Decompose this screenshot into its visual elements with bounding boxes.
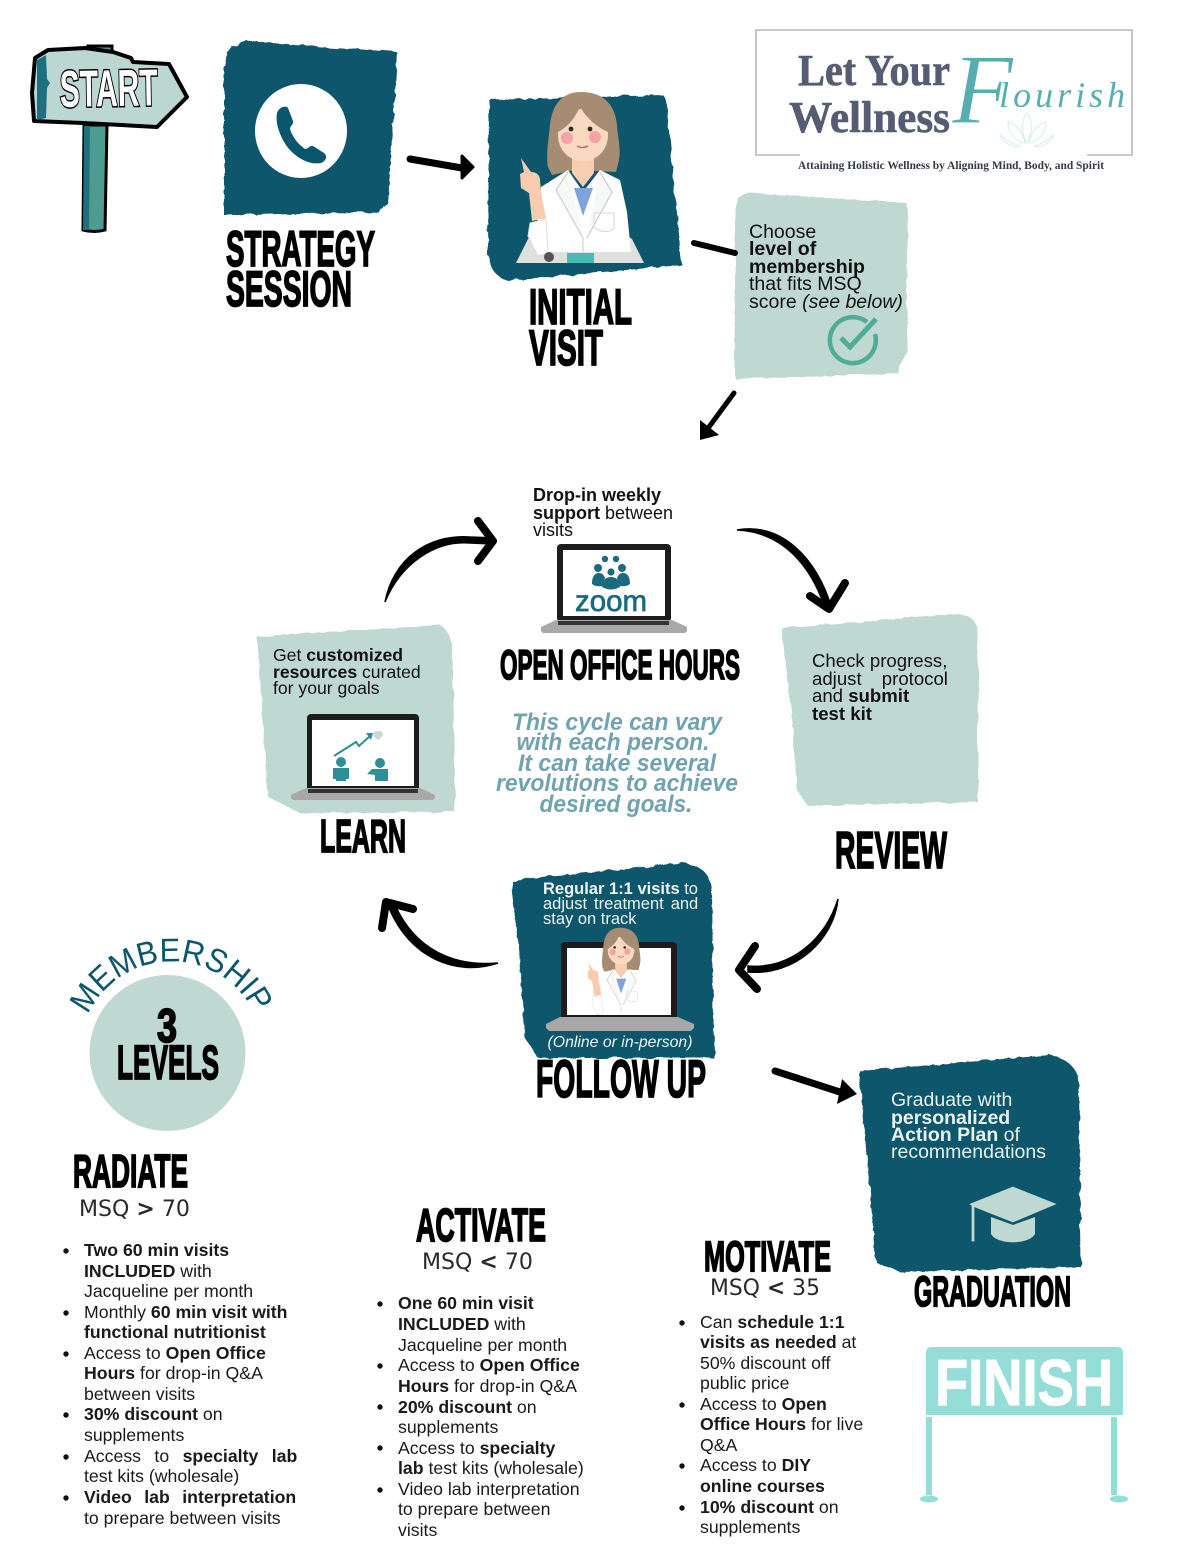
panel: strategy session (224, 41, 397, 215)
list: radiate benefits: supplements (84, 1425, 184, 1445)
heading: strategy session (226, 221, 375, 317)
panel: review (781, 614, 978, 806)
logo: F (951, 34, 1014, 145)
list: activate benefits (377, 1293, 589, 1540)
heading: motivate: MOTIVATE (704, 1233, 831, 1281)
heading: initial visit: INITIAL (529, 279, 632, 335)
list: radiate benefits: Monthly 60 min visit with (84, 1302, 287, 1322)
text: check progress: Check progress, (812, 650, 947, 671)
text: regular visits: adjust treatment and (543, 895, 698, 913)
text: drop-in support: Drop-in weekly (533, 485, 661, 505)
list: motivate benefits: Access to DIY (700, 1455, 811, 1475)
text: cycle note (496, 709, 738, 818)
icon: phone (255, 84, 347, 178)
membership text: level of (749, 238, 817, 260)
list: motivate benefits: Office Hours for live (700, 1414, 863, 1434)
heading: strategy session: SESSION (226, 261, 352, 317)
text: customized resources: resources curated (273, 662, 421, 682)
text: graduate: recommendations (891, 1141, 1046, 1163)
arrow: down to cycle (700, 393, 734, 440)
list: radiate benefits: functional nutritionist (84, 1322, 266, 1342)
list: radiate benefits: to prepare between visits (84, 1508, 281, 1528)
list: motivate benefits: Q&A (700, 1435, 738, 1455)
icon: graduation cap (968, 1186, 1058, 1242)
curved text: membership: MEMBERSHIP (70, 938, 271, 1012)
heading: graduation: GRADUATION (914, 1268, 1071, 1316)
list: radiate benefits (63, 1240, 302, 1528)
list: radiate benefits: INCLUDED with (84, 1261, 212, 1281)
list: activate benefits: Hours for drop-in Q&A (398, 1376, 576, 1396)
list: activate benefits: to prepare between (398, 1499, 550, 1519)
icon: learn laptop (291, 714, 435, 800)
list: radiate benefits: 30% discount on (84, 1404, 223, 1424)
list: motivate benefits: online courses (700, 1476, 825, 1496)
membership text: Choose (749, 221, 816, 243)
heading: radiate: RADIATE (73, 1145, 188, 1197)
list: radiate benefits: Two 60 min visits (84, 1240, 229, 1260)
list: radiate benefits: between visits (84, 1384, 195, 1404)
panel: initial visit (488, 92, 682, 280)
panel: graduation (860, 1055, 1081, 1272)
list: motivate benefits: public price (700, 1373, 790, 1393)
arrow: follow up to learn (382, 902, 498, 967)
text: regular visits: Regular 1:1 visits to (543, 880, 698, 898)
text: 3 levels (117, 999, 219, 1090)
list: motivate benefits: Access to Open (700, 1394, 827, 1414)
list: radiate benefits: Jacqueline per month (84, 1281, 253, 1301)
membership text: membership (749, 256, 865, 278)
heading: initial visit: VISIT (529, 320, 603, 376)
text: drop-in support: support between (533, 503, 673, 523)
text: graduate: Action Plan of (891, 1124, 1020, 1146)
list: activate benefits: One 60 min visit (398, 1293, 534, 1313)
list: activate benefits: Access to specialty (398, 1438, 555, 1458)
heading: strategy session: STRATEGY (226, 221, 375, 277)
heading: review: REVIEW (835, 822, 947, 880)
list: radiate benefits: test kits (wholesale) (84, 1466, 239, 1486)
list: activate benefits: Access to Open Office (398, 1355, 580, 1375)
logo: lourish (999, 75, 1129, 115)
list: motivate benefits: 50% discount off (700, 1353, 831, 1373)
membership text: score (see below) (749, 291, 903, 313)
text: regular visits: stay on track (543, 910, 637, 928)
arrow: follow up to graduation (775, 1071, 857, 1104)
tier: radiate (63, 1145, 302, 1528)
heading: activate: ACTIVATE (416, 1199, 546, 1251)
list: motivate benefits: 10% discount on (700, 1497, 839, 1517)
text: drop-in support: visits (533, 520, 573, 540)
list: motivate benefits: Can schedule 1:1 (700, 1312, 845, 1332)
start signpost (32, 46, 187, 232)
start text: START (59, 59, 158, 119)
heading: initial visit (529, 279, 632, 376)
text: graduate: Graduate with (891, 1089, 1012, 1111)
text: customized resources: Get customized (273, 645, 403, 665)
heading: follow up: FOLLOW UP (536, 1050, 706, 1109)
text: cycle note: desired goals. (540, 791, 692, 818)
list: activate benefits: Jacqueline per month (398, 1335, 567, 1355)
icon: zoom laptop (541, 544, 687, 633)
text: customized resources: for your goals (273, 678, 380, 698)
logo (756, 30, 1132, 172)
list: radiate benefits: Access to Open Office (84, 1343, 266, 1363)
heading: learn: LEARN (320, 810, 406, 862)
logo: Let Your (798, 46, 950, 95)
connector line (694, 243, 735, 253)
tier: activate (377, 1199, 589, 1540)
logo: Wellness (789, 93, 950, 142)
text: cycle note: It can take several (518, 750, 717, 777)
text: cycle note: This cycle can vary (512, 709, 724, 736)
panel: follow up (511, 863, 714, 1058)
illustration: doctor (516, 92, 644, 263)
list: activate benefits: lab test kits (wholesale) (398, 1458, 584, 1478)
arrow: review to follow up (739, 899, 838, 989)
logo: Attaining Holistic Wellness by Aligning Mind, Body, and Spirit (798, 160, 1104, 172)
icon: finish banner: FINISH (935, 1346, 1113, 1419)
list: motivate benefits: supplements (700, 1517, 800, 1537)
icon: laptop with doctor (546, 928, 694, 1031)
score: msq over 70: MSQ > 70 (79, 1197, 190, 1222)
list: radiate benefits: Access to specialty lab (84, 1446, 297, 1466)
arrow: learn to office hours (385, 521, 494, 602)
list: activate benefits: visits (398, 1520, 437, 1540)
icon: finish banner (920, 1346, 1128, 1502)
text: 3 levels: 3 (157, 999, 177, 1052)
list: motivate benefits: visits as needed at (700, 1332, 856, 1352)
text: online or in-person: (Online or in-person) (548, 1034, 692, 1051)
score: msq under 70: MSQ < 70 (422, 1250, 533, 1275)
list: activate benefits: 20% discount on (398, 1397, 537, 1417)
list: activate benefits: Video lab interpretation (398, 1479, 580, 1499)
heading: open office hours: OPEN OFFICE HOURS (500, 641, 740, 688)
tier: motivate (679, 1233, 868, 1537)
text: graduate: personalized (891, 1107, 1010, 1129)
score: msq under 35: MSQ < 35 (710, 1276, 820, 1301)
text: cycle note: with each person. (516, 729, 710, 756)
list: radiate benefits: Video lab interpretation (84, 1487, 296, 1507)
icon: zoom laptop: zoom (575, 585, 647, 618)
panel: learn (257, 625, 455, 813)
panel: choose membership (694, 193, 907, 379)
block: open office hours (500, 485, 740, 688)
icon: check circle (830, 317, 876, 363)
badge: membership levels (70, 938, 271, 1131)
text: check progress: adjust protocol (812, 668, 948, 689)
text: cycle note: revolutions to achieve (496, 770, 738, 797)
membership text: that fits MSQ (749, 273, 862, 295)
list: motivate benefits (679, 1312, 868, 1537)
list: radiate benefits: Hours for drop-in Q&A (84, 1363, 262, 1383)
text: check progress: and submit (812, 685, 909, 706)
arrow: office hours to review (737, 529, 845, 609)
list: activate benefits: INCLUDED with (398, 1314, 526, 1334)
list: activate benefits: supplements (398, 1417, 498, 1437)
text: 3 levels: LEVELS (117, 1037, 219, 1090)
arrow: strategy to initial visit (410, 156, 473, 178)
text: check progress: test kit (812, 703, 872, 724)
